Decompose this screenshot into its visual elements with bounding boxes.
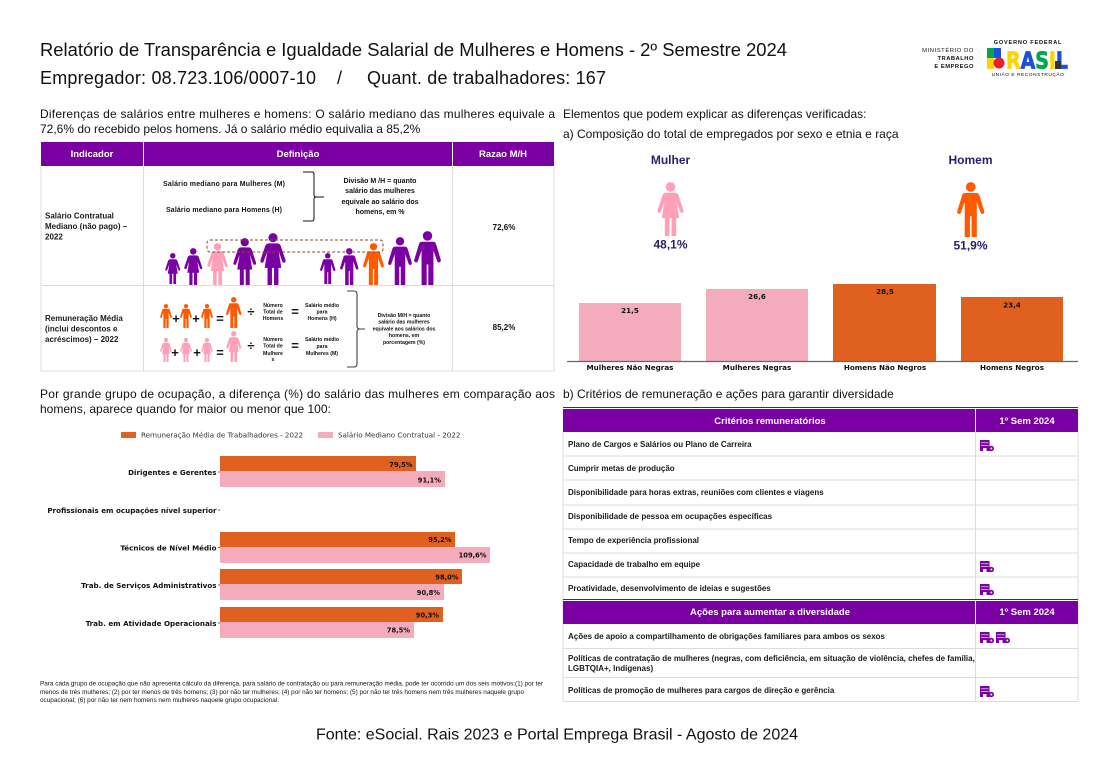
row: salário contratual mediano: equivale ao salário dos [341, 199, 419, 206]
icons: women equation [160, 331, 299, 362]
bar chart: occupation groups [47, 456, 490, 638]
logo: governo federal [987, 40, 1068, 78]
bar chart: sex and race composition: 26,6 [748, 292, 766, 301]
bar chart: occupation groups: Técnicos de Nível Médio [120, 544, 217, 552]
footnote: ocupacional; (6) por não ter nem homens nem mulheres naquele grupo ocupacional. [40, 697, 279, 704]
criteria rows: Disponibilidade de pessoa em ocupações específicas [568, 512, 773, 521]
row: remuneração média: homens, em [389, 333, 420, 339]
row: remuneração média: Mulhere [263, 351, 283, 357]
bar chart: occupation groups: 95,2% [428, 536, 452, 544]
footnote [40, 680, 543, 704]
bar chart: sex and race composition: 21,5 [621, 306, 639, 315]
row: remuneração média: para [317, 310, 328, 316]
footnote: menos de três mulheres; (2) por ter menos de três homens; (3) por não ter mulheres; (4) por não ter homens; (5) por não ter três homens nem três mulheres naquele grupo [40, 689, 525, 696]
bar chart: occupation groups: Trab. em Atividade Operacionais [86, 619, 216, 628]
bar chart: occupation groups: 78,5% [387, 626, 410, 634]
criteria rows [568, 440, 824, 593]
icons: criteria checks [980, 440, 994, 595]
panel: indicator table [41, 142, 554, 371]
icons: men equation: + [172, 311, 180, 326]
row: remuneração média: (inclui descontos e [45, 324, 118, 334]
table header [41, 142, 554, 166]
icons: men equation [160, 297, 299, 328]
row: remuneração média: acréscimos) – 2022 [45, 335, 119, 344]
row: remuneração média: Total de [263, 310, 283, 316]
panel: woman share: 48,1% [653, 238, 688, 252]
row: salário contratual mediano [45, 172, 515, 285]
row: salário contratual mediano: Mediano (não pago) – [45, 222, 128, 231]
text block: salary differences intro: 72,6% do recebido pelos homens. Já o salário médio equivalia a 85,2% [40, 122, 421, 136]
row: remuneração média: Número [263, 303, 283, 309]
table header: Definição [277, 149, 320, 160]
panel: woman share: Mulher [651, 153, 690, 167]
criteria rows: Tempo de experiência profissional [568, 536, 699, 545]
panel: man share: 51,9% [953, 238, 988, 252]
title: Relatório de Transparência e Igualdade Salarial de Mulheres e Homens - 2º Semestre 2024 [40, 40, 787, 60]
row: remuneração média: s [272, 357, 275, 363]
logo: ministério: TRABALHO [937, 56, 974, 62]
panel: woman share [651, 153, 690, 252]
row: salário contratual mediano: Salário Contratual [45, 212, 114, 220]
title: Empregador: 08.723.106/0007-10 [40, 68, 316, 88]
diversity rows: Políticas de promoção de mulheres para cargos de direção e gerência [568, 686, 835, 695]
logo: governo federal: GOVERNO FEDERAL [994, 40, 1062, 46]
row: remuneração média: porcentagem (%) [383, 340, 425, 346]
bar chart: sex and race composition: Homens Negros [980, 363, 1044, 372]
icons: women equation: ÷ [247, 338, 255, 353]
row: remuneração média: Divisão M/H = quanto [378, 313, 430, 319]
icons: diversity checks [980, 632, 1010, 697]
bar chart: occupation groups: Dirigentes e Gerentes [128, 468, 216, 477]
diversity header: Ações para aumentar a diversidade [690, 607, 850, 618]
bar chart: sex and race composition: Mulheres Não Negras [587, 363, 673, 372]
logo: governo federal: RASIL [1006, 48, 1068, 74]
row: remuneração média [45, 291, 515, 367]
table header: Razao M/H [479, 149, 527, 160]
panel: man share: Homem [948, 153, 993, 167]
text block: salary differences intro [40, 107, 555, 136]
icons: men equation: + [192, 311, 200, 326]
text block: occupation intro: homens, aparece quando for maior ou menor que 100: [40, 402, 331, 416]
criteria header: Critérios remuneratórios [714, 416, 826, 427]
bar chart: occupation groups: Profissionais em ocupações nível superior [47, 506, 217, 515]
criteria rows: Plano de Cargos e Salários ou Plano de Carreira [568, 440, 752, 449]
diversity rows: LGBTQIA+, Indígenas) [568, 664, 653, 673]
row: remuneração média: Total de [263, 344, 283, 350]
bar chart: sex and race composition: 28,5 [876, 287, 894, 296]
diversity header [563, 599, 1078, 624]
bar chart: occupation groups: 109,6% [459, 552, 487, 560]
footnote: Para cada grupo de ocupação que não apresenta cálculo da diferença, para salário de contratação ou para remuneração média, pode ter ocorrido um dos seis motivos:(1) por ter [40, 680, 543, 688]
criteria rows: Cumprir metas de produção [568, 464, 675, 473]
logo: governo federal: UNIÃO E RECONSTRUÇÃO [992, 71, 1064, 78]
row: salário contratual mediano: 2022 [45, 232, 63, 242]
bar chart: sex and race composition: 23,4 [1003, 300, 1021, 310]
bar chart: occupation groups: Trab. de Serviços Administrativos [81, 581, 216, 590]
icons: women equation: = [291, 338, 299, 353]
bar chart: occupation groups: 90,8% [417, 589, 440, 597]
bar chart: occupation groups: 98,0% [435, 574, 459, 582]
bar chart: sex and race composition: Mulheres Negras [723, 363, 791, 372]
row: remuneração média: Salário médio [305, 337, 339, 343]
row: salário contratual mediano: homens, em % [355, 209, 405, 216]
row: remuneração média: Salário médio [305, 303, 339, 309]
row: remuneração média: Remuneração Média [45, 314, 123, 323]
icons: men equation: = [291, 304, 299, 319]
row: remuneração média: Mulheres (M) [306, 351, 338, 357]
icons: women equation: + [171, 345, 179, 360]
criteria rows: Disponibilidade para horas extras, reuniões com clientes e viagens [568, 488, 824, 497]
bar chart: occupation groups: 79,5% [389, 461, 413, 469]
row: salário contratual mediano: Divisão M /H = quanto [344, 178, 416, 185]
panel: man share [948, 153, 993, 252]
heading: elements explaining differences [563, 107, 899, 141]
logo: ministério: E EMPREGO [934, 64, 974, 70]
icons: men equation: ÷ [247, 304, 255, 319]
icons: men equation: = [216, 311, 224, 326]
bar chart: occupation groups: 91,1% [418, 476, 441, 484]
heading: elements explaining differences: Elementos que podem explicar as diferenças verificadas: [563, 107, 866, 121]
text block: salary differences intro: Diferenças de salários entre mulheres e homens: O salário mediano das mulheres equivale a [40, 107, 555, 121]
row: salário contratual mediano: Salário mediano para Homens (H) [166, 207, 282, 214]
chart legend: Remuneração Média de Trabalhadores - 2022 [141, 430, 303, 440]
row: salário contratual mediano: salário das mulheres [345, 188, 415, 195]
source line: Fonte: eSocial. Rais 2023 e Portal Emprega Brasil - Agosto de 2024 [316, 726, 798, 744]
diversity rows: Políticas de contratação de mulheres (negras, com deficiência, em situação de violência, chefes de família, [568, 654, 975, 663]
icons: women equation: + [193, 345, 201, 360]
row: salário contratual mediano: 72,6% [493, 223, 515, 232]
row: remuneração média: Homens (H) [307, 316, 337, 322]
title: / [337, 68, 342, 88]
table header: Indicador [71, 149, 114, 160]
chart legend [121, 430, 460, 440]
criteria rows: Capacidade de trabalho em equipe [568, 560, 701, 569]
icons: median people row [165, 231, 441, 285]
row: remuneração média: equivale aos salários dos [373, 326, 436, 332]
row: remuneração média: salário das mulheres [378, 320, 430, 326]
criteria rows: Proatividade, desenvolvimento de ideias e sugestões [568, 584, 771, 593]
diversity header: 1º Sem 2024 [999, 607, 1055, 618]
heading: elements explaining differences: a) Composição do total de empregados por sexo e etnia e raça [563, 127, 899, 141]
logo: ministério [922, 47, 974, 70]
title: Quant. de trabalhadores: 167 [367, 68, 606, 88]
bar chart: occupation groups: 90,3% [416, 612, 439, 620]
row: salário contratual mediano: Salário mediano para Mulheres (M) [163, 181, 285, 188]
text block: occupation intro: Por grande grupo de ocupação, a diferença (%) do salário das mulheres em comparação aos [40, 387, 555, 401]
criteria header [563, 407, 1078, 432]
heading: remuneration criteria: b) Critérios de remuneração e ações para garantir diversidade [563, 387, 894, 401]
row: remuneração média: para [317, 344, 328, 350]
diversity rows [568, 632, 975, 695]
bar chart: sex and race composition: Homens Não Negros [844, 363, 926, 372]
criteria header: 1º Sem 2024 [999, 416, 1055, 427]
title [40, 40, 787, 88]
row: remuneração média: Número [263, 337, 283, 343]
text block: occupation intro [40, 387, 555, 416]
panel: criteria table [563, 407, 1078, 702]
row: remuneração média: 85,2% [493, 323, 515, 332]
diversity rows: Ações de apoio a compartilhamento de obrigações familiares para ambos os sexos [568, 632, 886, 641]
row: remuneração média: Homens [263, 316, 283, 322]
chart legend: Salário Mediano Contratual - 2022 [338, 430, 460, 440]
bar chart: sex and race composition [567, 284, 1078, 372]
icons: women equation: = [216, 345, 224, 360]
logo: ministério: MINISTÉRIO DO [922, 47, 974, 54]
